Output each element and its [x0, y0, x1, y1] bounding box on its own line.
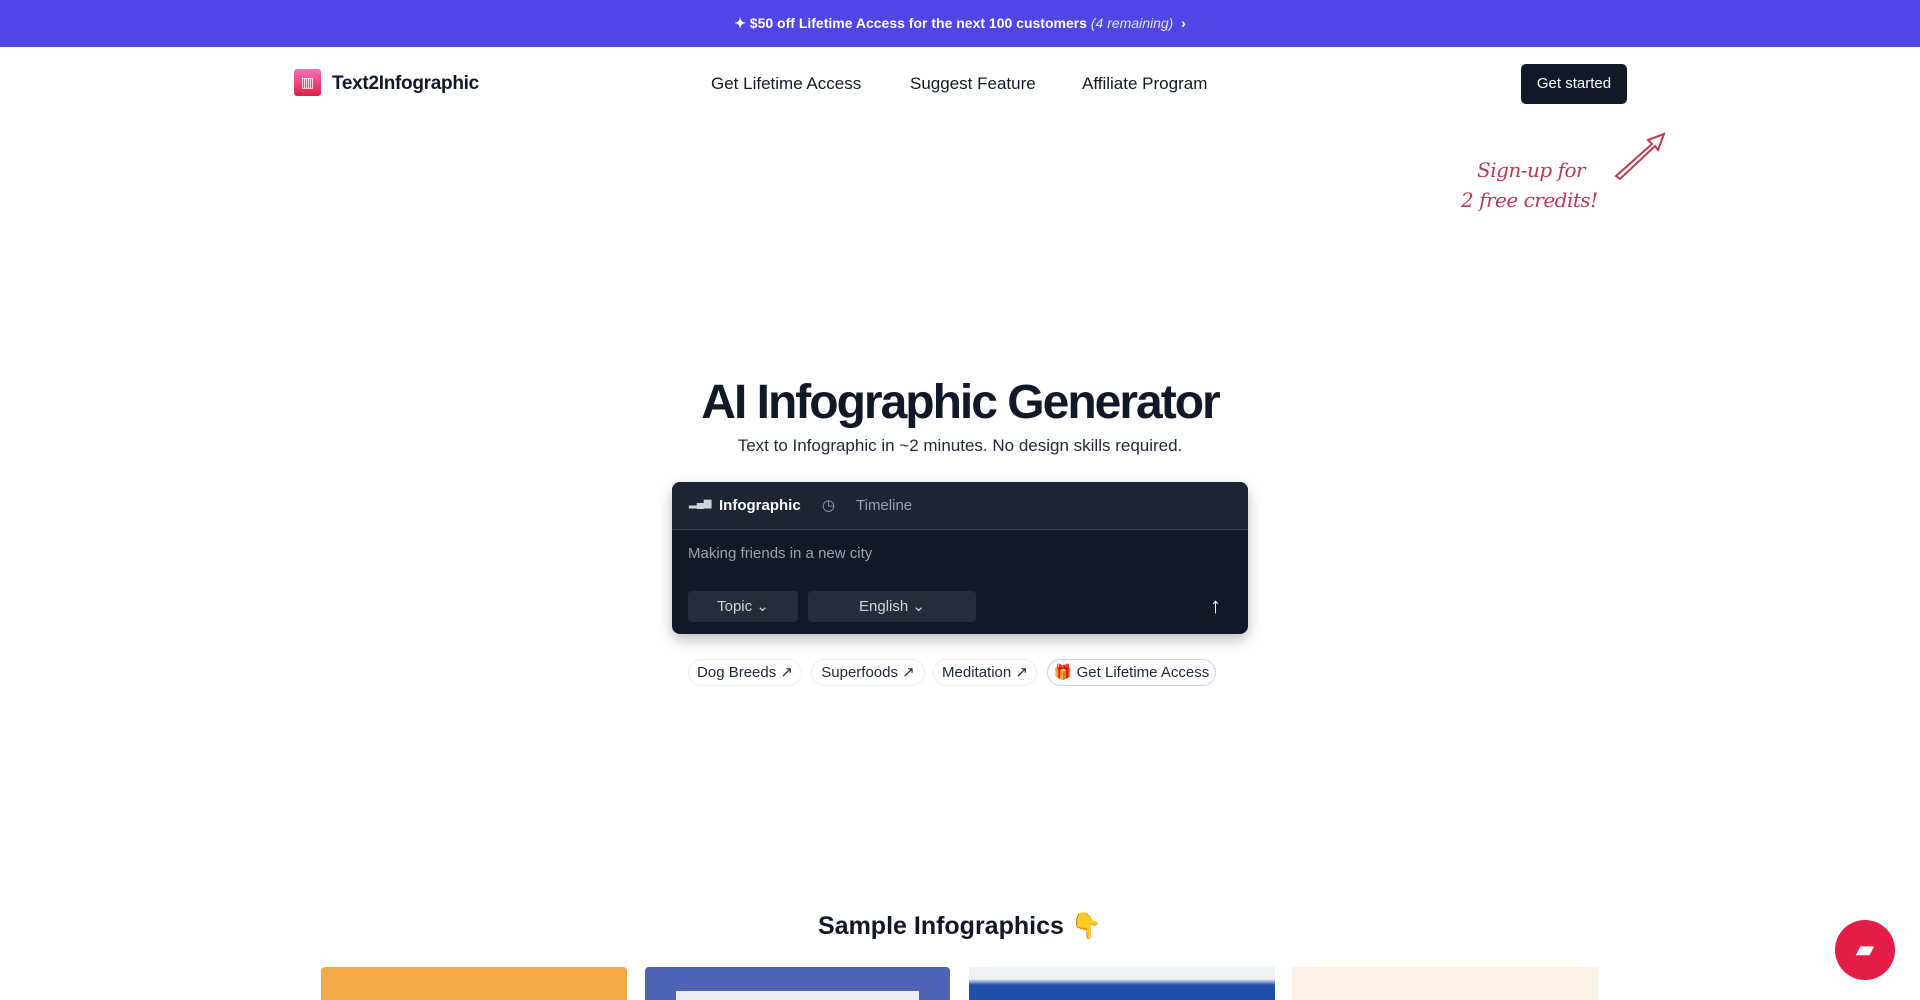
nav links: Suggest Feature [910, 74, 1036, 93]
logo [294, 69, 479, 96]
chips: Superfoods ↗ [821, 664, 915, 681]
dropdown: topic: Topic ⌄ [717, 598, 769, 615]
chips [688, 659, 1216, 686]
icon: logo: ▥ [301, 74, 314, 90]
tabs [672, 482, 1248, 530]
tabs: Timeline [856, 497, 912, 514]
chips: 🎁 Get Lifetime Access [1054, 664, 1209, 681]
heading: sample infographics: Sample Infographics 👇 [818, 912, 1102, 940]
icon: logo [294, 69, 321, 96]
button: get started [1521, 64, 1627, 104]
banner [0, 0, 1920, 47]
button: get started: Get started [1537, 75, 1611, 92]
nav links: Affiliate Program [1082, 74, 1207, 93]
banner: ✦ $50 off Lifetime Access for the next 100 customers (4 remaining) › [734, 15, 1186, 31]
tabs: Infographic [719, 497, 801, 514]
logo: Text2Infographic [332, 73, 479, 94]
chips: Meditation ↗ [942, 664, 1028, 681]
icon: chat button: ▰ [1856, 936, 1874, 963]
nav links: Get Lifetime Access [711, 74, 861, 93]
title: AI Infographic Generator [701, 376, 1219, 429]
icon: chat button [1835, 920, 1895, 980]
sample cards [321, 967, 1598, 1000]
subtitle: Text to Infographic in ~2 minutes. No design skills required. [738, 436, 1182, 455]
tabs: ◷ [822, 497, 835, 514]
chips: Dog Breeds ↗ [697, 664, 793, 681]
dropdown: topic [688, 591, 798, 622]
nav links [711, 74, 1207, 93]
dropdown: language [808, 591, 976, 622]
panel: input card [672, 482, 1248, 634]
placeholder text: Making friends in a new city [688, 545, 872, 562]
tabs: ▂▄▆ [689, 498, 711, 509]
dropdown: language: English ⌄ [859, 598, 925, 615]
callout: sign-up [1460, 158, 1598, 212]
callout: sign-up: 2 free credits! [1461, 188, 1598, 212]
icon: submit arrow: ↑ [1210, 593, 1221, 618]
callout: sign-up: Sign-up for [1477, 158, 1585, 182]
arrow [1614, 132, 1666, 180]
